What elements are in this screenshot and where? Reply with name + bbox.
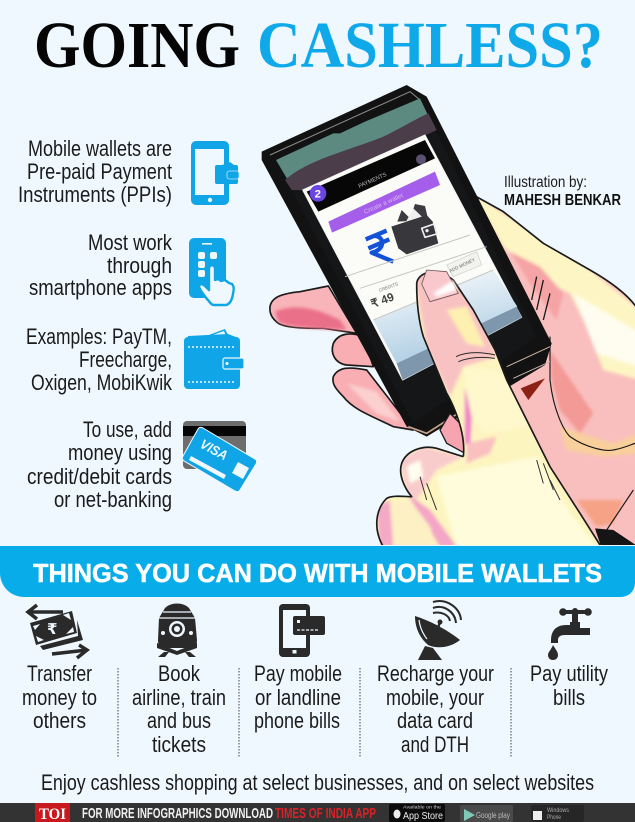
footer text: FOR MORE INFOGRAPHICS DOWNLOAD [82,805,273,822]
add money label: ADD MONEY [448,257,476,274]
banner heading: THINGS YOU CAN DO WITH MOBILE WALLETS [33,558,602,588]
purple circle [310,185,326,202]
column: pay phone bills: Pay mobile [254,661,342,686]
column: pay phone bills [254,661,342,733]
text block: wallet examples: Freecharge, [79,347,172,372]
text block: wallet examples: Oxigen, MobiKwik [31,370,173,395]
text block: mobile wallets are PPIs [18,136,173,207]
badge: google play: Google play [476,810,511,820]
palm [476,196,635,545]
small circle [416,154,426,164]
column: transfer money: money to [22,685,97,710]
text block: wallet examples [26,324,173,395]
icon: smartphone with tapping hand [189,238,234,305]
text block: how to add money [27,417,172,512]
badge: windows phone: Windows [547,808,569,814]
screen heading: PAYMENTS [358,172,388,190]
text block: most work through apps [29,230,173,300]
screen number: 2 [315,188,321,200]
title: CASHLESS? [257,9,603,82]
column: recharge: and DTH [401,732,469,757]
icon: water tap [548,608,592,660]
title: GOING [34,9,240,82]
icon: phone with card [279,604,325,657]
illustration credit [504,174,621,209]
badge: app store: App Store [403,810,443,822]
column: book tickets: Book [158,661,201,686]
column: transfer money [22,661,97,733]
column: utility bills: bills [553,685,585,710]
text block: mobile wallets are PPIs: Pre-paid Payment [27,159,173,184]
column: book tickets: tickets [152,732,206,757]
text block: how to add money: To use, add [83,417,172,442]
credits label: CREDITS [378,281,399,293]
column: recharge: Recharge your [377,661,494,686]
purple button [328,172,440,233]
column: pay phone bills: or landline [255,685,341,710]
icon: credit cards [182,421,257,492]
badge: windows phone [531,805,584,822]
text block: how to add money: or net-banking [54,487,172,512]
phone upper glass [276,98,428,178]
column: transfer money: Transfer [27,661,92,686]
wallet icon [391,204,438,254]
title [34,9,603,82]
amount: ₹ 49 [369,290,396,311]
column: recharge: mobile, your [386,685,484,710]
phone screen [303,135,522,380]
left fingers [270,286,413,430]
footer text: TIMES OF INDIA APP [275,805,376,822]
illustration credit: Illustration by: [504,174,587,191]
icon: credit cards: VISA [198,436,230,463]
icon: money transfer [28,605,87,658]
column: transfer money: others [33,708,86,733]
pointing finger and lower hand [377,270,600,553]
badge: google play [460,805,513,822]
icon: satellite dish [415,601,461,660]
badge: windows phone: Phone [547,815,562,821]
column: pay phone bills: phone bills [254,708,340,733]
text block: most work through apps: smartphone apps [29,275,172,300]
icon: phone with wallet [191,141,239,205]
text block: most work through apps: through [107,253,172,278]
column: utility bills: Pay utility [530,661,609,686]
phone body [262,85,552,437]
TOI logo [35,803,70,822]
badge: app store [389,804,445,822]
column: book tickets: airline, train [132,685,226,710]
text block: mobile wallets are PPIs: Instruments (PPIs) [18,182,172,207]
small finger under phone [440,413,465,453]
text block: most work through apps: Most work [88,230,173,255]
icon: train [157,604,197,657]
banner [0,546,635,597]
icon: wallet [184,329,244,389]
column: recharge: data card [397,708,473,733]
column: book tickets: and bus [147,708,211,733]
text block: wallet examples: Examples: PayTM, [26,324,172,349]
rupee symbol: ₹ [47,620,57,638]
column: book tickets [132,661,226,757]
column: utility bills [530,661,609,710]
text block: how to add money: credit/debit cards [27,464,172,489]
screen rows [345,235,493,320]
footer bar [0,803,635,822]
text block: how to add money: money using [68,440,172,465]
column: recharge [377,661,494,757]
finger nail [422,270,458,302]
text block: mobile wallets are PPIs: Mobile wallets are [28,136,172,161]
badge: app store: Available on the [403,804,442,810]
illustration: hand holding phone [262,85,635,553]
button label: Create a wallet [363,192,405,216]
rupee sign [366,231,393,262]
